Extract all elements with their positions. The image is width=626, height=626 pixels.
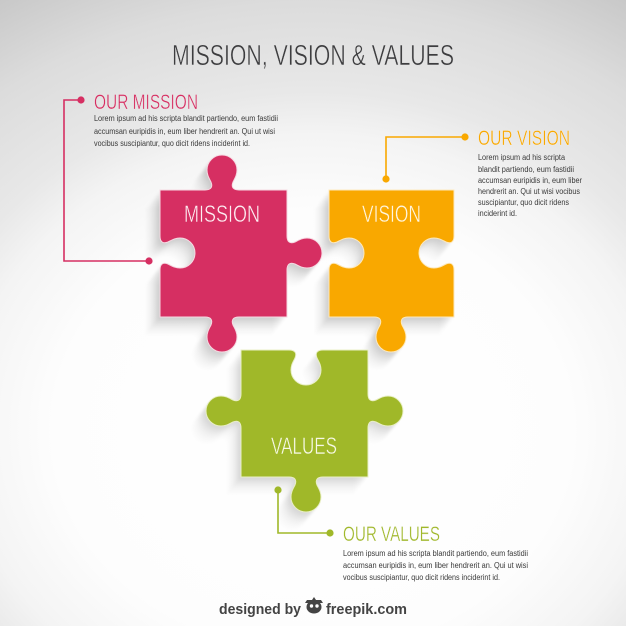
heading: our mission: OUR MISSION <box>94 91 198 114</box>
title: MISSION, VISION & VALUES <box>172 40 454 72</box>
connector: values <box>274 486 334 537</box>
icon: freepik mascot <box>305 597 323 614</box>
footer: freepik credit: freepik.com <box>326 601 407 618</box>
text block: our vision: inciderint id. <box>478 209 517 218</box>
text block: our vision: hendrerit an. Qui ut wisi vocibus <box>478 187 580 196</box>
heading: our vision: OUR VISION <box>478 127 570 150</box>
footer: freepik credit <box>219 597 407 618</box>
text block: our values: accumsan euripidis in, eum liber hendrerit an. Qui ut wisi <box>343 561 528 570</box>
heading: our values: OUR VALUES <box>343 523 440 546</box>
label: vision: VISION <box>362 201 421 228</box>
footer: freepik credit: designed by <box>219 601 302 618</box>
label: values: VALUES <box>271 433 337 460</box>
connector: vision <box>382 133 469 183</box>
text block: our values: Lorem ipsum ad his scripta blandit partiendo, eum fastidii <box>343 549 528 558</box>
text block: our vision <box>478 127 582 218</box>
piece shadows <box>146 158 452 530</box>
text block: our vision: blandit partiendo, eum fastidii <box>478 165 574 174</box>
text block: our mission <box>94 91 278 148</box>
connector: mission <box>64 96 153 265</box>
text block: our values <box>343 523 528 582</box>
text block: our mission: vocibus suscipiantur, quo dicit ridens inciderint id. <box>94 139 250 148</box>
label: mission: MISSION <box>184 201 260 228</box>
text block: our vision: Lorem ipsum ad his scripta <box>478 153 566 162</box>
text block: our mission: Lorem ipsum ad his scripta blandit partiendo, eum fastidii <box>94 114 278 123</box>
text block: our values: vocibus suscipiantur, quo dicit ridens inciderint id. <box>343 573 500 582</box>
text block: our vision: suscipiantur, quo dicit ridens <box>478 198 569 207</box>
panel: vision puzzle piece <box>329 190 454 352</box>
text block: our vision: accumsan euripidis in, eum liber <box>478 176 582 185</box>
panel: mission puzzle piece <box>160 155 322 352</box>
text block: our mission: accumsan euripidis in, eum liber hendrerit an. Qui ut wisi <box>94 127 275 136</box>
panel: values puzzle piece <box>206 350 403 512</box>
